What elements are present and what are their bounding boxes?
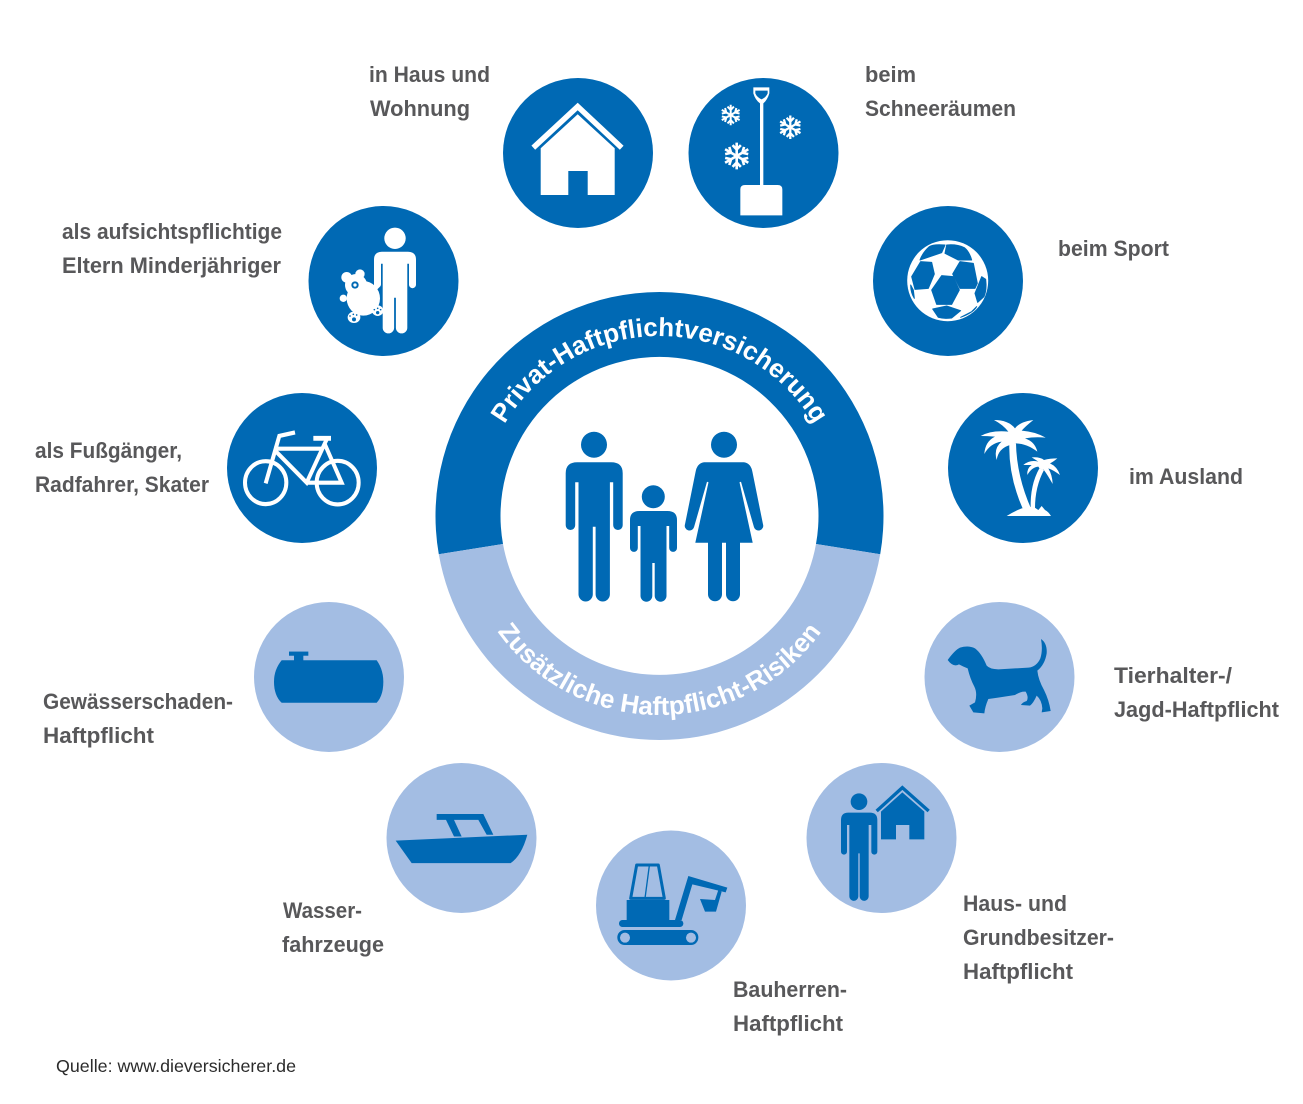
icon: owner with house <box>806 763 956 913</box>
central ring <box>436 292 884 740</box>
label: Wasserfahrzeuge: fahrzeuge <box>282 932 384 957</box>
label: Wasserfahrzeuge: Wasser- <box>283 898 362 923</box>
label: Bauherren-Haftpflicht <box>733 977 847 1036</box>
label: im Ausland: im Ausland <box>1129 464 1243 489</box>
label: als Fußgänger, Radfahrer, Skater <box>35 438 209 497</box>
label: Tierhalter-/Jagd-Haftpflicht: Jagd-Haftpflicht <box>1114 697 1280 722</box>
label: beim Schneeräumen: beim <box>865 62 916 87</box>
icon: boat <box>386 763 536 913</box>
label: Bauherren-Haftpflicht: Haftpflicht <box>733 1011 844 1036</box>
icon: snow shovel <box>688 78 838 228</box>
icon: oil tank <box>254 602 404 752</box>
label: beim Sport: beim Sport <box>1058 236 1170 261</box>
ring heading: top: Privat-Haftpflichtversicherung <box>490 317 826 424</box>
ring heading: bottom: Zusätzliche Haftpflicht-Risiken <box>498 622 821 720</box>
label: in Haus und Wohnung: in Haus und <box>369 62 490 87</box>
label: Bauherren-Haftpflicht: Bauherren- <box>733 977 847 1002</box>
icon: family <box>566 432 763 602</box>
label: Gewässerschaden-Haftpflicht: Gewässerschaden- <box>43 689 233 714</box>
label: als aufsichtspflichtige Eltern Minderjähriger: als aufsichtspflichtige <box>62 219 282 244</box>
label: Wasserfahrzeuge <box>282 898 384 957</box>
label: Haus- und Grundbesitzer-Haftpflicht: Haftpflicht <box>963 959 1074 984</box>
label: Haus- und Grundbesitzer-Haftpflicht: Grundbesitzer- <box>963 925 1114 950</box>
label: Haus- und Grundbesitzer-Haftpflicht: Haus- und <box>963 891 1067 916</box>
source note: Quelle: www.dieversicherer.de <box>56 1056 296 1076</box>
label: beim Schneeräumen <box>865 62 1016 121</box>
label: Gewässerschaden-Haftpflicht <box>43 689 233 748</box>
icon: palm trees <box>948 393 1098 543</box>
label: als aufsichtspflichtige Eltern Minderjähriger: Eltern Minderjähriger <box>62 253 281 278</box>
label: in Haus und Wohnung: Wohnung <box>370 96 470 121</box>
label: Tierhalter-/Jagd-Haftpflicht: Tierhalter-/ <box>1114 663 1232 688</box>
label: Gewässerschaden-Haftpflicht: Haftpflicht <box>43 723 155 748</box>
ring segment: Zusätzliche Haftpflicht-Risiken <box>439 544 880 740</box>
label: Tierhalter-/Jagd-Haftpflicht <box>1114 663 1280 722</box>
label: als aufsichtspflichtige Eltern Minderjähriger <box>62 219 282 278</box>
icon: house <box>503 78 653 228</box>
label: als Fußgänger, Radfahrer, Skater: Radfahrer, Skater <box>35 472 209 497</box>
label: beim Schneeräumen: Schneeräumen <box>865 96 1016 121</box>
label: Haus- und Grundbesitzer-Haftpflicht <box>963 891 1114 984</box>
icon: excavator <box>596 830 746 980</box>
icon: bicycle <box>227 393 377 543</box>
ring segment: Privat-Haftpflichtversicherung <box>436 292 884 554</box>
icon: parent with teddy bear <box>308 206 458 356</box>
label: in Haus und Wohnung <box>369 62 490 121</box>
label: als Fußgänger, Radfahrer, Skater: als Fußgänger, <box>35 438 182 463</box>
icon: football <box>873 206 1023 356</box>
icon: dog <box>924 602 1074 752</box>
